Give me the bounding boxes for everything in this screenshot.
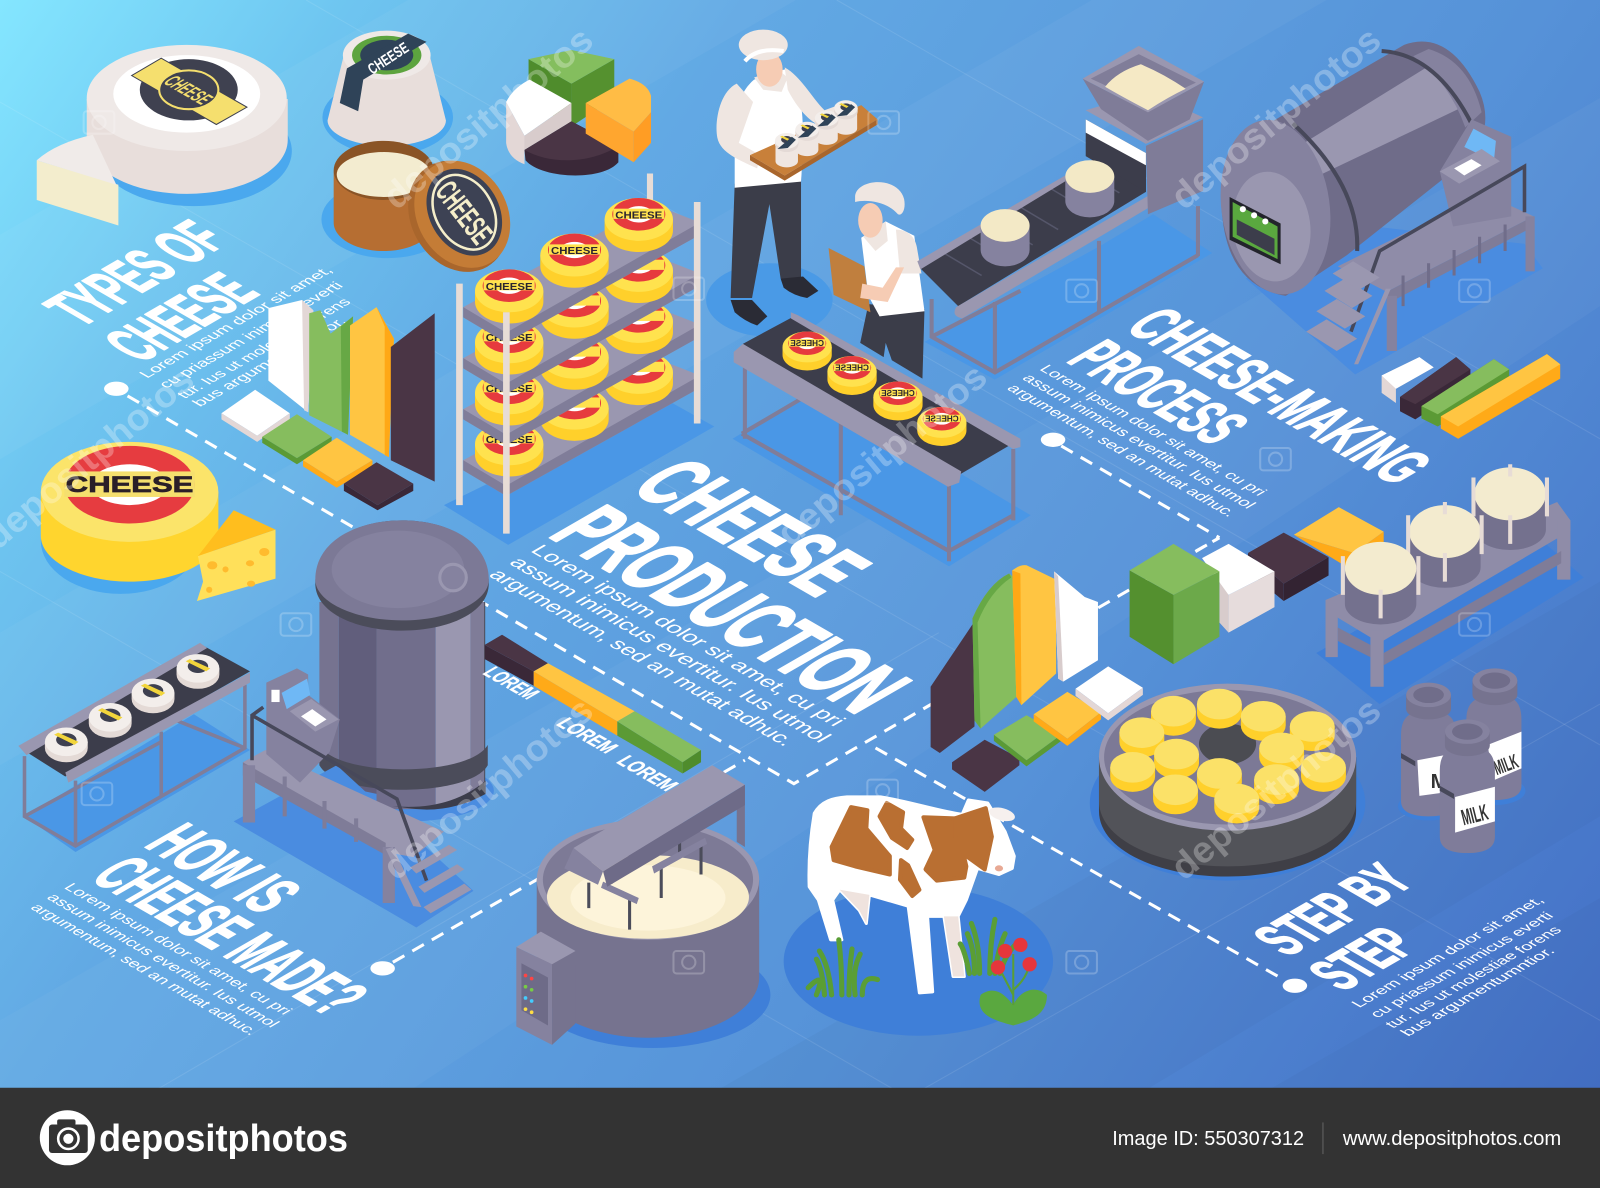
console [266, 668, 340, 783]
heading: step by step: STEP BY [1239, 855, 1428, 964]
main title [529, 446, 932, 726]
stairs [1306, 261, 1391, 364]
bar chart: types of cheese [221, 300, 435, 510]
text block: cheese-making process: assum inimicus evertitur. Ius utmol [1018, 372, 1259, 511]
centre bar chart with lorem labels [477, 635, 701, 794]
shelf level 1: CHEESE [486, 282, 533, 293]
shelf level 2 [463, 249, 700, 394]
console [1440, 119, 1511, 227]
control box [516, 932, 576, 1045]
text block: types of cheese: cu priassum inimicus everti [155, 280, 347, 391]
heading: how is cheese made [75, 814, 385, 1025]
mixer arm [564, 765, 745, 930]
image id: Image ID: 550307312 [1112, 1128, 1304, 1150]
shelf level 1: CHEESE [615, 210, 662, 221]
illustration: cow in meadow [784, 797, 1053, 1036]
illustration: brown cheese box with lid [321, 141, 529, 290]
middle vat [1408, 502, 1482, 588]
cheese rounds [1110, 689, 1346, 823]
back vat [1473, 464, 1547, 550]
heading: types of cheese: TYPES OF [30, 212, 243, 335]
lorem labels: LOREM [477, 663, 545, 703]
illustration: white round cheese with wedge [37, 45, 292, 226]
left milk can: M [1431, 771, 1448, 793]
back milk can: MILK [1491, 751, 1522, 780]
illustration: vertical tank [315, 520, 494, 821]
illustration: coloured bars right [1382, 354, 1560, 439]
control panel [1230, 197, 1281, 264]
heading: step by step: STEP [1294, 919, 1433, 999]
grass tufts [808, 919, 1016, 995]
shelf level 2: CHEESE [486, 333, 533, 344]
heading: types of cheese [30, 212, 274, 371]
ribbon text: CHEESE [365, 39, 412, 78]
belt cheeses: CHEESE [790, 339, 824, 348]
clipboard [829, 248, 870, 312]
belt cheeses: CHEESE [881, 389, 915, 398]
watermarks [0, 19, 1490, 973]
lorem labels: LOREM [551, 714, 624, 757]
left milk can [1401, 683, 1456, 816]
illustration: shaping boxes [1130, 507, 1384, 664]
watermarks: depositphotos [375, 19, 601, 217]
shelf level 3 [463, 300, 700, 445]
worker hat [855, 182, 905, 215]
platform deck [243, 750, 444, 903]
lorem labels: LOREM [611, 752, 684, 794]
text block: cheese-making process: Lorem ipsum dolor sit amet, cu pri [1035, 363, 1270, 498]
cow body [809, 797, 1014, 993]
illustration: conveyor with white cheeses [18, 643, 250, 852]
lid text: CHEESE [429, 174, 500, 251]
illustration: mixing vat [516, 765, 770, 1048]
worker torso [861, 221, 924, 316]
text block: how is cheese made: argumentum, sed an mutat adhuc. [26, 902, 262, 1038]
illustration: platform with console and stairs [234, 668, 473, 928]
front vat [1343, 542, 1418, 624]
back milk can [1466, 668, 1522, 800]
illustration: horizontal cylinder tank with platform [1210, 42, 1543, 374]
text block: step by step: Lorem ipsum dolor sit amet, [1348, 895, 1548, 1010]
watermarks: depositphotos [375, 689, 601, 888]
shelf level 3: CHEESE [486, 384, 533, 395]
dark box [1248, 533, 1329, 601]
text block: cheese-making process [1003, 363, 1270, 519]
tray with cheeses [750, 100, 878, 181]
logo icon [40, 1110, 95, 1165]
table [1326, 502, 1570, 687]
belt cheeses [783, 332, 966, 446]
heading: step by step [1239, 855, 1433, 999]
text block: how is cheese made [26, 881, 295, 1038]
watermarks: depositphotos [1163, 19, 1388, 217]
shelf level 1 [463, 198, 700, 343]
text block: step by step [1348, 895, 1566, 1039]
text block: types of cheese: tur. Ius ut molestiae forens [173, 296, 355, 401]
main text block [483, 542, 851, 749]
tank body [1221, 42, 1485, 296]
illustration: shelving with yellow cheese wheels [444, 173, 714, 545]
illustration: table with three vats [1316, 464, 1584, 704]
logo wordmark: depositphotos [99, 1117, 348, 1159]
illustration: sorting conveyor with yellow cheeses [733, 312, 1031, 566]
watermarks: depositphotos [1163, 689, 1388, 888]
wedge with holes [197, 510, 276, 601]
chef torso [717, 52, 851, 188]
hopper machine [1083, 46, 1204, 214]
text block: types of cheese: bus argumentumntior. [189, 315, 351, 409]
label: CHEESE [66, 472, 193, 497]
cheese label text: CHEESE [158, 73, 218, 108]
shelf level 4: CHEESE [486, 435, 533, 446]
main title: CHEESE [610, 446, 891, 608]
website: www.depositphotos.com [1342, 1128, 1561, 1150]
illustration: round tray of yellow cheeses [1090, 684, 1365, 881]
bar chart: right [931, 565, 1143, 792]
illustration: worker with clipboard [829, 182, 924, 379]
belt cheeses: CHEESE [835, 363, 869, 372]
main text block: assum inimicus evertitur. Ius utmol [504, 554, 837, 746]
shelf level 4 [463, 351, 700, 496]
chef hat [739, 30, 788, 61]
text block: how is cheese made: assum inimicus evertitur. Ius utmol [42, 891, 283, 1030]
text block: step by step: bus argumentumntior. [1397, 945, 1559, 1039]
text block: cheese-making process: argumentum, sed an mutat adhuc. [1003, 382, 1240, 519]
heading: cheese-making process: PROCESS [1052, 331, 1264, 453]
stairs [386, 845, 471, 913]
main title: PRODUCTION [529, 493, 932, 726]
shelf level 1: CHEESE [551, 246, 598, 257]
footer bar [0, 1088, 1600, 1188]
flower with leaves [980, 938, 1047, 1026]
green box [1130, 544, 1219, 664]
front milk can: MILK [1459, 800, 1491, 830]
belt cheeses: CHEESE [924, 414, 959, 423]
watermarks: depositphotos [769, 355, 995, 554]
orange box [1294, 507, 1384, 571]
brown spots [832, 803, 992, 896]
chef trousers and shoes [731, 180, 818, 326]
text block: step by step: tur. Ius ut molestiae forens [1382, 924, 1566, 1031]
illustration: hopper conveyor [917, 46, 1212, 380]
heading: types of cheese: CHEESE [89, 264, 274, 371]
front milk can [1440, 719, 1495, 853]
white box [1202, 544, 1274, 633]
cheese wedge [37, 135, 118, 226]
illustration: chef carrying tray [706, 30, 878, 337]
platform [1338, 194, 1535, 351]
dashed connector lines [104, 382, 1307, 993]
illustration: pie of cheese blocks [506, 50, 651, 175]
heading: how is cheese made: HOW IS [129, 814, 318, 923]
lorem labels [477, 663, 684, 794]
illustration: milk cans [1398, 668, 1526, 853]
text block: step by step: cu priassum inimicus everti [1366, 910, 1558, 1020]
text block: types of cheese [136, 264, 355, 409]
tank front cap [1210, 113, 1341, 302]
illustration: white cone cheese with ribbon [322, 31, 453, 155]
illustration: big yellow cheese with wedge [41, 442, 276, 601]
heading: how is cheese made: CHEESE MADE? [75, 847, 385, 1025]
text block: how is cheese made: Lorem ipsum dolor sit amet, cu pri [60, 881, 295, 1017]
main text block: Lorem ipsum dolor sit amet, cu pri [525, 542, 851, 730]
heading: cheese-making process [1052, 299, 1448, 493]
text block: types of cheese: Lorem ipsum dolor sit amet, [136, 264, 337, 381]
main text block: argumentum, sed an mutat adhuc. [483, 566, 801, 749]
tank dome [315, 520, 489, 631]
